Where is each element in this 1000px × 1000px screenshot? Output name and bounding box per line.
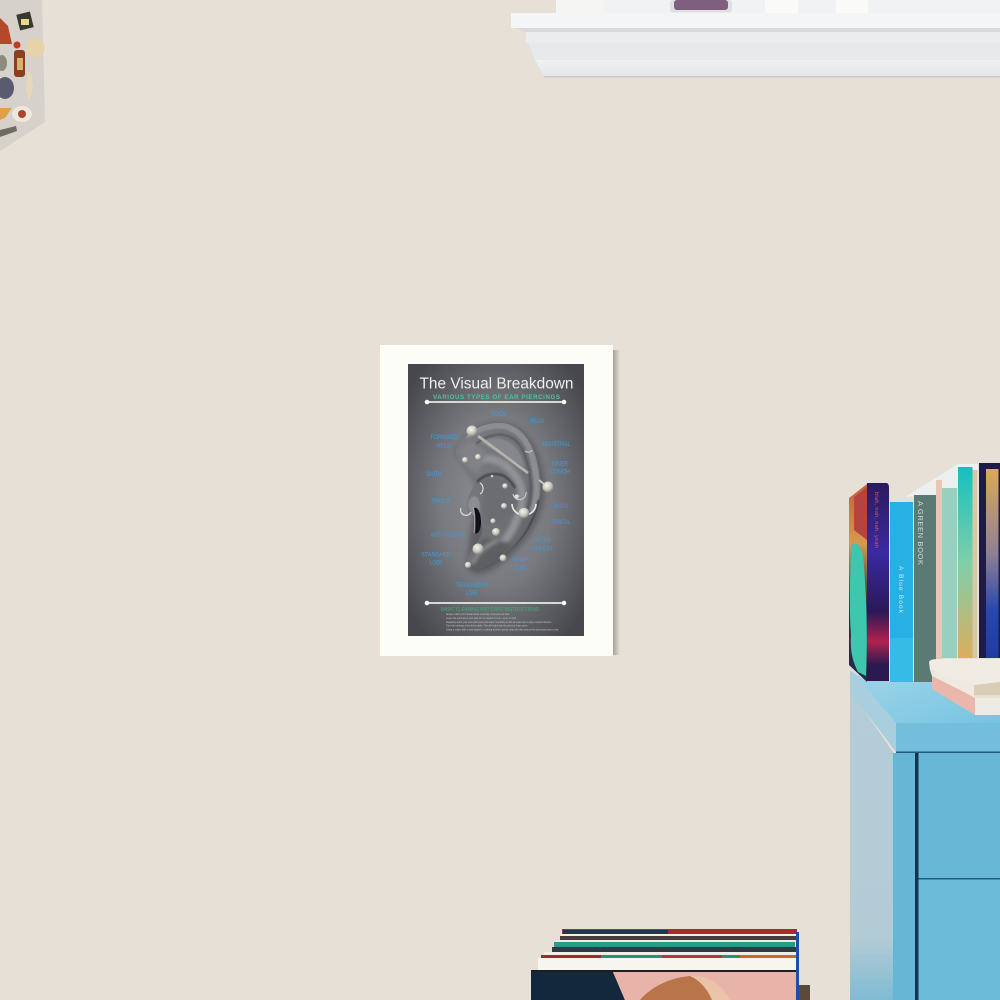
concha bowl	[482, 479, 518, 508]
print shadow	[613, 350, 620, 655]
industrial barbell	[466, 426, 554, 492]
bottom divider	[425, 601, 566, 605]
vase with dried flowers	[670, 0, 732, 12]
lobe shade	[470, 538, 511, 570]
book: a blue book	[890, 502, 913, 682]
label: inner lobe: LOBE	[514, 566, 528, 572]
ear canal	[474, 508, 481, 533]
care instructions: Always wash your hands before touching newly pierced ears.	[446, 613, 510, 616]
tragus	[468, 496, 480, 518]
label: standard lobe	[422, 552, 451, 566]
label: rook: ROOK	[491, 412, 507, 418]
teal gradient book	[958, 467, 978, 658]
transverse lobe stud	[465, 562, 471, 568]
pink book edge	[936, 480, 942, 660]
pennant with pins	[0, 0, 45, 151]
care heading: BASIC CLEANING AND CARE INSTRUCTIONS:	[441, 607, 540, 613]
dark gradient book	[979, 463, 1000, 658]
standard lobe stud	[472, 544, 484, 554]
orbital ring	[512, 504, 536, 515]
label: orbital: ORBITAL	[552, 520, 571, 526]
label: transverse lobe: TRANSVERSE	[456, 583, 488, 589]
lobe highlight	[472, 540, 498, 564]
label: forward helix	[430, 435, 458, 450]
care instructions: Regularly wash your ears with soap and water. Carefully do this at least once a day to avoid infection.	[446, 621, 552, 624]
stacked books lying flat	[929, 659, 1000, 715]
top divider	[425, 400, 566, 404]
poster background	[408, 364, 584, 636]
label: inner lobe: INNER	[513, 558, 530, 564]
record crate	[531, 929, 810, 1000]
label: daith: DAITH	[426, 472, 442, 478]
label: standard lobe: STANDARD	[422, 552, 451, 558]
helix groove	[476, 435, 531, 514]
forward helix studs	[462, 454, 481, 463]
label: helix: HELIX	[530, 419, 544, 425]
care instructions	[446, 613, 559, 632]
daith ring	[480, 483, 483, 494]
book: a green book	[914, 495, 936, 682]
white mat	[380, 345, 613, 656]
anti tragus studs	[490, 518, 500, 536]
antihelix fold	[474, 459, 522, 548]
book: a green book: A GREEN BOOK	[916, 501, 925, 565]
orbital ball	[519, 508, 529, 518]
books	[849, 463, 1000, 715]
lower helix shadow	[478, 500, 539, 572]
label: inner conch	[550, 462, 570, 476]
book: ampersand	[849, 483, 889, 682]
blue cabinet	[850, 670, 1000, 1000]
inner conch stud	[502, 483, 508, 489]
poster title: The Visual Breakdown	[420, 376, 574, 392]
label: outer conch: CONCH	[532, 546, 552, 552]
front top slab	[896, 723, 1000, 752]
left fold	[462, 444, 484, 472]
cabinet side wall	[850, 690, 893, 1000]
label: standard lobe: LOBE	[430, 560, 442, 566]
care instructions: Leave the earrings in your ears for six weeks or more, even at night.	[446, 617, 517, 620]
label: transverse lobe	[456, 583, 488, 597]
side top slab	[850, 670, 896, 752]
mint book	[942, 488, 957, 658]
label: industrial: INDUSTRIAL	[542, 442, 571, 448]
drawer gap	[915, 753, 918, 1000]
tragus highlight	[473, 507, 475, 533]
white bookend	[905, 464, 978, 658]
ear soft shadow	[455, 423, 544, 574]
helix ring	[525, 450, 532, 452]
drawer divider	[918, 878, 1000, 880]
label: anti-tragus: ANTI-TRAGUS	[430, 533, 466, 539]
upper drawer	[918, 753, 1000, 878]
label: tragus: TRAGUS	[431, 499, 451, 505]
wall shelf	[511, 0, 1000, 78]
care instructions: Turn the earrings a few times daily. This will help keep the pierced holes open.	[446, 624, 528, 628]
ear base	[456, 428, 540, 562]
ear body layers	[456, 423, 540, 570]
tragus ring	[461, 508, 471, 515]
front post	[893, 753, 915, 1000]
helix rim	[466, 426, 537, 512]
ear illustration	[450, 418, 554, 574]
top surface	[850, 670, 1000, 723]
piercing labels	[422, 412, 571, 597]
framed print	[380, 345, 620, 656]
crus shadow	[477, 474, 515, 488]
label: inner conch: CONCH	[550, 470, 570, 476]
label: inner lobe	[513, 558, 530, 572]
snug stud and ring	[513, 492, 526, 500]
book: a blue book: A Blue Book	[897, 566, 904, 614]
label: forward helix: FORWARD	[430, 435, 458, 441]
label: snug: SNUG	[554, 504, 569, 510]
rook stud	[491, 475, 493, 477]
poster subtitle: VARIOUS TYPES OF EAR PIERCINGS	[433, 394, 560, 401]
lower drawer	[918, 880, 1000, 1000]
label: outer conch	[532, 538, 552, 552]
label: forward helix: HELIX	[437, 444, 451, 450]
spine text: blah, nah, nah, yeah	[873, 492, 879, 548]
label: transverse lobe: LOBE	[466, 591, 478, 597]
label: inner conch: INNER	[552, 462, 569, 468]
label: outer conch: OUTER	[533, 538, 552, 544]
concha stud	[501, 503, 507, 509]
care instructions: Using a cotton ball or pad dipped in rubbing alcohol, gently clean the skin around the piercings twice a day.	[446, 628, 559, 632]
upper fossa	[480, 439, 525, 468]
inner lobe stud	[500, 554, 506, 562]
